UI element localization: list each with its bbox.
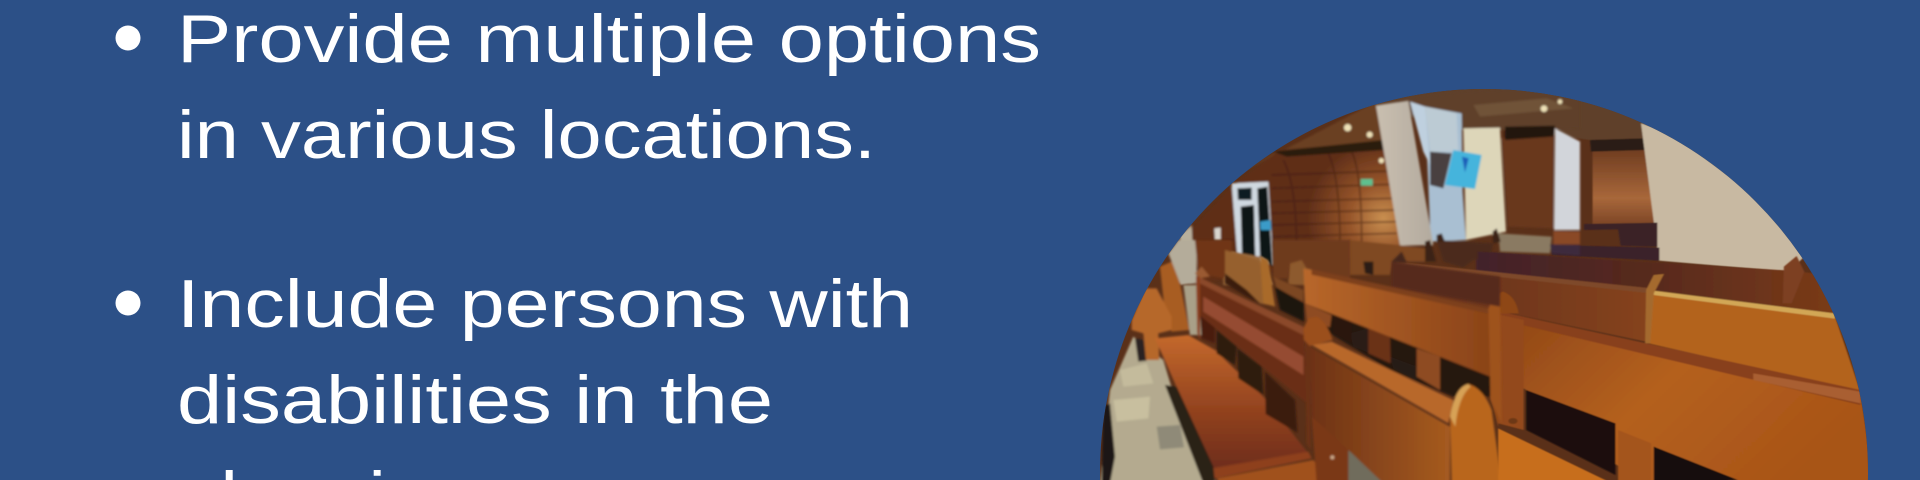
photo base <box>1100 89 1868 480</box>
far pews <box>1223 228 1580 285</box>
bullet: include persons with disabilities <box>116 266 913 480</box>
long seat <box>1155 335 1332 480</box>
bullet: include persons with disabilities: disabilities in the <box>177 362 773 438</box>
row 2: pew back <box>1391 262 1860 392</box>
row 4: glossy back <box>1195 267 1307 403</box>
row 3: pew back left section <box>1303 268 1502 423</box>
left small bench <box>1132 262 1189 362</box>
row 1 and 2 far left edges <box>1392 252 1500 307</box>
pillar <box>1376 101 1506 246</box>
far right of room <box>1376 87 1814 272</box>
row 4: end cap highlight <box>1450 384 1471 427</box>
circular photo: church pews <box>1100 87 1876 480</box>
mid pews <box>1225 240 1350 322</box>
floor <box>1100 337 1217 480</box>
beige floor behind pew <box>1350 328 1417 380</box>
row 4: end cap <box>1450 384 1502 480</box>
wall-mounted screen <box>1430 150 1482 189</box>
bullet: provide multiple options: Provide multiple options <box>177 1 1041 77</box>
upper room: wall, door, pillar, screen <box>1180 87 1580 285</box>
foreground pews and floor <box>1100 240 1502 480</box>
exit sign <box>1361 179 1373 186</box>
row 1: far dark pew <box>1478 252 1835 313</box>
row 4: near section <box>1303 317 1453 480</box>
orange seat foreground <box>1498 428 1616 480</box>
bullet: provide multiple options <box>116 1 1041 173</box>
right rows of pews <box>1391 252 1876 480</box>
door <box>1232 182 1273 267</box>
row 4: supports under pew <box>1200 315 1297 433</box>
row 3: slats under pew <box>1305 303 1490 397</box>
back wall wood panel <box>1502 126 1580 230</box>
bullet list <box>116 1 1041 480</box>
row 3: pew back right section <box>1491 292 1876 480</box>
bullet: include persons with disabilities: Include persons with <box>177 266 913 342</box>
bullet: provide multiple options: in various locations. <box>177 97 876 173</box>
